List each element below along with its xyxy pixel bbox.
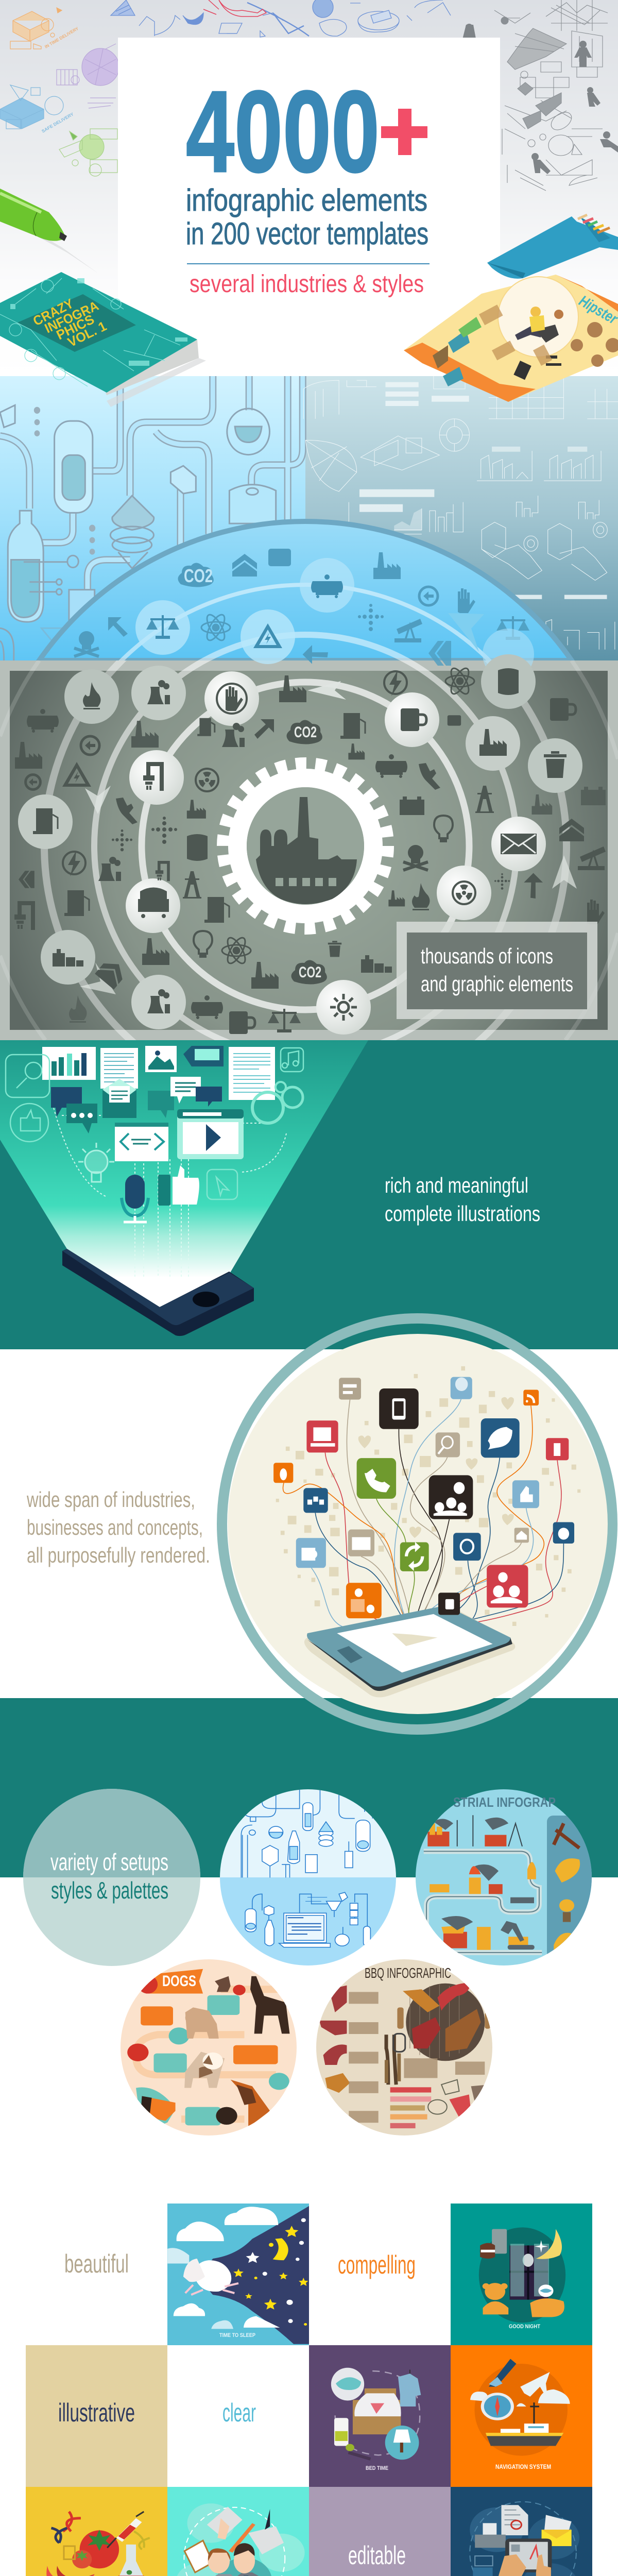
title: 4000+: 4000 xyxy=(186,66,380,196)
icons in bubbles xyxy=(33,668,566,1021)
inner grey frame xyxy=(10,671,608,1030)
pictograms row: figures on chart xyxy=(359,382,607,599)
hologram phone xyxy=(62,1249,254,1336)
callout: thousands of icons xyxy=(397,922,597,1019)
pen shadow xyxy=(0,211,98,273)
panel: concepts white band xyxy=(0,1349,618,1698)
hero backdrop xyxy=(0,0,618,376)
video window xyxy=(177,1109,244,1159)
book title: INFOGRA xyxy=(42,298,101,336)
dome overlay xyxy=(39,521,572,660)
tile illustration: navigation system xyxy=(470,2359,570,2456)
caption: bed time: BED TIME xyxy=(366,2465,388,2471)
central gear with factory xyxy=(223,764,388,928)
CO2 labels on grey: CO2 xyxy=(294,724,317,741)
concept ring xyxy=(222,1318,612,1730)
coloured wires xyxy=(283,1399,563,1635)
book title: CRAZY xyxy=(30,295,76,329)
doodles: colourful delivery line icons xyxy=(0,8,119,176)
panel: illustrations band teal xyxy=(0,1040,618,1349)
blue pencil pouch xyxy=(487,215,618,279)
bulb xyxy=(78,1143,114,1182)
CO2 label on dome: CO2 xyxy=(184,565,213,586)
grid word: editable with arrow: editable xyxy=(348,2541,406,2570)
tile illustration: bed time xyxy=(331,2368,421,2460)
subtitle lines: infographic elements xyxy=(186,183,427,217)
thumbs up xyxy=(158,1165,199,1206)
text: wide span of industries xyxy=(26,1487,210,1567)
circle: variety of setups: styles & palettes xyxy=(51,1877,168,1904)
panel: grey icon field xyxy=(0,660,618,1040)
caption: good night: GOOD NIGHT xyxy=(509,2324,540,2330)
icon bubbles on grey xyxy=(18,654,582,1035)
callout: thousands of icons: thousands of icons xyxy=(421,944,553,968)
grid word: illustrative: illustrative xyxy=(58,2398,135,2427)
upper orbit rings on blue xyxy=(118,583,491,660)
circle: dogs infographic xyxy=(118,1958,299,2138)
hologram light beam xyxy=(0,1040,368,1307)
panel: industrial lab and chart backdrop xyxy=(0,376,618,1107)
tile illustration: contract xyxy=(176,2503,305,2576)
code window xyxy=(115,1123,168,1161)
captions on delivery icons xyxy=(41,26,79,134)
cream disc with app-tree illustration xyxy=(228,1334,608,1714)
BBQ heading: BBQ INFOGRAPHIC xyxy=(365,1965,451,1981)
captions on delivery icons: SAFE DELIVERY xyxy=(41,111,75,134)
microphone xyxy=(122,1175,148,1222)
icon bubbles on dome xyxy=(135,558,534,680)
doodles: grey silhouettes xyxy=(462,24,618,174)
caption: time to sleep: TIME TO SLEEP xyxy=(219,2332,255,2338)
doodles: grey management sketches xyxy=(494,0,608,191)
text: rich and meaningful: rich and meaningful xyxy=(385,1173,528,1197)
text: wide span of industries: all purposefully rendered. xyxy=(27,1543,210,1567)
illustration: white line charts xyxy=(303,376,618,650)
text: rich and meaningful: complete illustrations xyxy=(385,1201,540,1226)
document cards xyxy=(100,1047,275,1100)
book title xyxy=(30,295,109,350)
grid word: compelling: compelling xyxy=(338,2250,416,2279)
heart shapes xyxy=(358,1397,514,1538)
photo card and tag xyxy=(145,1046,224,1072)
text: wide span of industries: businesses and concepts, xyxy=(27,1515,203,1539)
tile illustration: message xyxy=(470,2502,579,2576)
circle: industrial infographic xyxy=(412,1788,598,1970)
foreground hero objects xyxy=(0,189,618,407)
chart card xyxy=(42,1047,96,1080)
illustration: lab pipes xyxy=(0,376,303,660)
doodles: blue business sketches xyxy=(111,0,451,37)
tagline: several industries & styles xyxy=(190,270,424,298)
hologram icons xyxy=(6,1046,303,1278)
DOGS label: DOGS xyxy=(162,1973,196,1990)
orbit rings xyxy=(0,660,618,1040)
circle: BBQ infographic xyxy=(314,1958,494,2138)
book title: VOL. 1 xyxy=(65,318,109,350)
tile illustration: good night xyxy=(479,2227,565,2323)
panel: teal band behind circles xyxy=(0,1698,618,1877)
CO2 labels on grey: CO2 xyxy=(299,964,321,981)
poster mockup xyxy=(404,275,618,402)
divider line xyxy=(187,263,430,264)
text: wide span of industries: wide span of industries, xyxy=(26,1487,195,1512)
circle: variety of setups xyxy=(23,1789,200,1966)
tablet xyxy=(304,1605,515,1698)
green marker pen xyxy=(0,189,67,241)
subtitle lines: in 200 vector templates xyxy=(186,216,428,251)
caption: navigation system: NAVIGATION SYSTEM xyxy=(495,2463,551,2470)
chat bubbles xyxy=(51,1077,222,1133)
circle: variety of setups: variety of setups xyxy=(50,1849,168,1875)
CO2 labels on grey xyxy=(294,724,321,981)
app icons xyxy=(273,1377,574,1618)
book title: PHICS xyxy=(54,311,97,343)
arrows on rings xyxy=(80,613,577,994)
captions on delivery icons: IN TIME DELIVERY xyxy=(44,26,79,49)
scattered confetti squares xyxy=(276,1366,580,1627)
hero white panel xyxy=(118,38,500,376)
grid word: beautiful: beautiful xyxy=(64,2249,129,2278)
circle: blue line lab xyxy=(216,1788,402,1967)
icons scattered on blue dome xyxy=(74,549,529,668)
outline tiles xyxy=(6,1048,303,1199)
subtitle lines xyxy=(186,183,428,251)
grid: tile colours xyxy=(26,2204,592,2576)
scattered grey icons xyxy=(14,666,606,1034)
book mockup xyxy=(0,272,206,407)
tile illustration: time to sleep xyxy=(167,2206,309,2344)
tile illustration: genetic modification xyxy=(46,2512,150,2576)
envelope xyxy=(102,1079,136,1118)
doodles: red sketch bulb xyxy=(203,0,266,16)
heading in industrial circle: STRIAL INFOGRAP xyxy=(453,1794,556,1810)
plus sign xyxy=(381,109,427,155)
text: rich and meaningful xyxy=(385,1173,540,1226)
grid word: clear: clear xyxy=(222,2398,256,2427)
